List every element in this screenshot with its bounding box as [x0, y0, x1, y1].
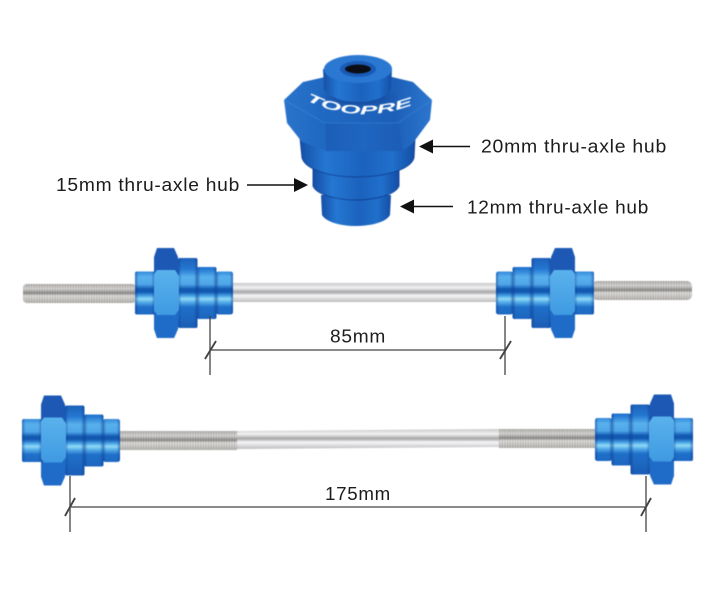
arrow: 15mm [247, 178, 308, 192]
label: 20mm: 20mm thru-axle hub [481, 136, 667, 156]
15mm step [313, 165, 399, 200]
hexagon flange [284, 77, 432, 151]
left nut [135, 248, 233, 338]
left nut [22, 396, 120, 486]
label: 15mm: 15mm thru-axle hub [56, 174, 240, 195]
brand mark [306, 100, 415, 114]
right nut [496, 248, 594, 338]
long axle assembly [22, 394, 693, 486]
arrow: 12mm [400, 200, 453, 214]
arrow: 20mm [419, 140, 470, 154]
right nut [595, 394, 693, 484]
175mm dimension [65, 476, 651, 532]
175mm dimension: 175mm [325, 483, 391, 504]
rear axle product: stepped hub adapter [283, 54, 433, 227]
smooth rod [232, 283, 498, 302]
label: 12mm: 12mm thru-axle hub [467, 196, 649, 218]
rear axle product: stepped hub adapter: TOOPRE [310, 93, 412, 116]
top collar [323, 69, 392, 102]
85mm dimension [205, 316, 511, 375]
20mm step [300, 138, 415, 177]
left thread [23, 284, 136, 303]
short axle assembly [23, 248, 692, 338]
12mm step [321, 195, 391, 226]
left thread [120, 431, 237, 450]
85mm dimension: 85mm [330, 326, 386, 346]
right thread [499, 429, 596, 448]
smooth rod [235, 429, 503, 449]
right thread [592, 281, 692, 300]
